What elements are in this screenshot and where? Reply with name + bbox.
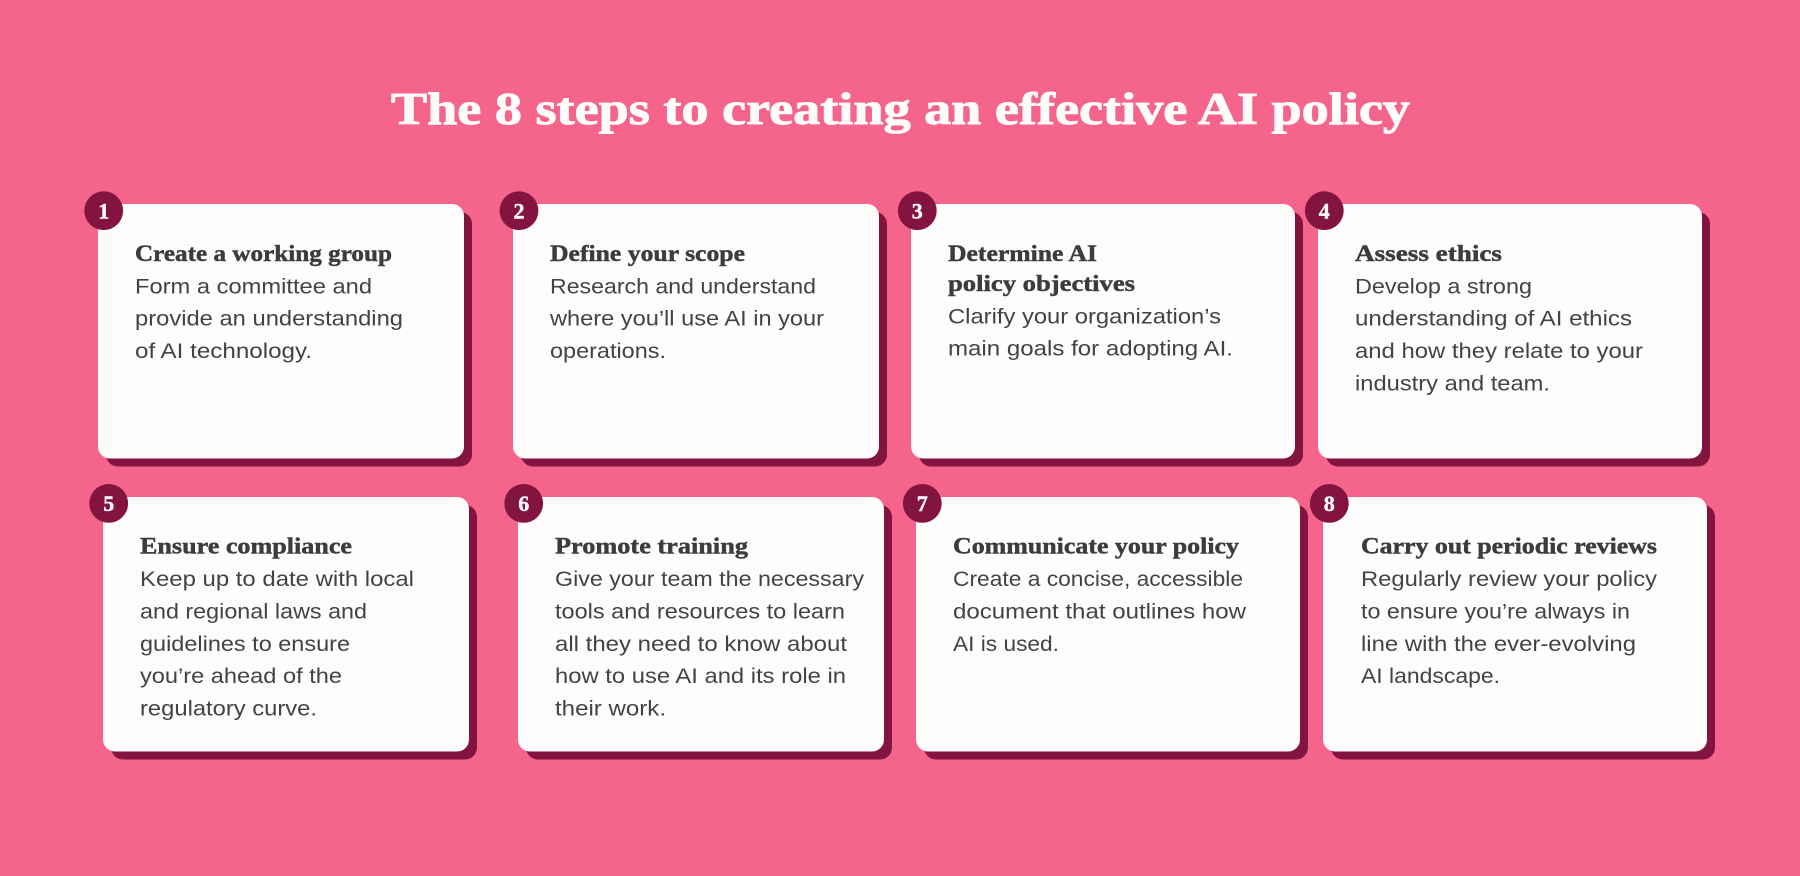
text: step 5 description: guidelines to ensure bbox=[140, 633, 350, 656]
badge: 1 bbox=[84, 191, 123, 230]
text: step 3 description bbox=[948, 305, 1233, 361]
heading: step 5: Ensure compliance bbox=[140, 534, 352, 559]
text: step 1 description bbox=[135, 275, 403, 363]
heading: step 2: Define your scope bbox=[550, 241, 745, 266]
text: step 7 description: AI is used. bbox=[953, 633, 1059, 656]
badge: 3: 3 bbox=[912, 198, 923, 224]
badge: 8 bbox=[1310, 484, 1349, 523]
heading: step 3: Determine AI bbox=[948, 241, 1097, 266]
text: step 8 description bbox=[1361, 568, 1658, 688]
text: step 6 description: Give your team the necessary bbox=[555, 568, 865, 591]
badge: 1: 1 bbox=[98, 198, 109, 224]
panel: step 4 bbox=[1305, 191, 1710, 467]
panel: step 1 bbox=[84, 191, 472, 467]
text: step 2 description bbox=[549, 275, 824, 363]
badge: 8: 8 bbox=[1324, 491, 1335, 516]
text: step 4 description: Develop a strong bbox=[1355, 275, 1532, 298]
text: step 6 description: how to use AI and its role in bbox=[555, 665, 846, 688]
text: step 6 description bbox=[555, 568, 865, 721]
text: step 8 description: to ensure you’re always in bbox=[1361, 600, 1630, 623]
badge: 6 bbox=[504, 484, 543, 523]
text: step 7 description bbox=[953, 568, 1247, 656]
text: step 2 description: Research and understand bbox=[550, 275, 816, 298]
badge: 7: 7 bbox=[917, 491, 928, 516]
badge: 5 bbox=[89, 484, 128, 523]
badge: 2: 2 bbox=[514, 198, 524, 224]
text: step 8 description: line with the ever-evolving bbox=[1361, 633, 1636, 656]
badge: 3 bbox=[898, 191, 937, 230]
panel: step 7 bbox=[903, 484, 1308, 760]
panel: step 2 bbox=[500, 191, 887, 467]
text: step 3 description: main goals for adopting AI. bbox=[948, 338, 1233, 361]
text: step 2 description: operations. bbox=[550, 340, 666, 363]
text: step 5 description: and regional laws and bbox=[140, 600, 367, 623]
text: step 4 description: and how they relate to your bbox=[1355, 340, 1643, 363]
heading: step 7: Communicate your policy bbox=[953, 534, 1240, 559]
heading: step 1: Create a working group bbox=[135, 241, 392, 266]
text: step 4 description bbox=[1355, 275, 1643, 395]
text: step 1 description: of AI technology. bbox=[135, 340, 312, 363]
heading: step 8: Carry out periodic reviews bbox=[1361, 534, 1657, 559]
heading: step 3 bbox=[948, 241, 1135, 296]
text: step 5 description: you’re ahead of the bbox=[140, 665, 342, 688]
text: step 7 description: Create a concise, accessible bbox=[953, 568, 1243, 591]
text: step 5 description bbox=[140, 568, 414, 721]
text: step 6 description: their work. bbox=[555, 698, 666, 721]
heading: step 6: Promote training bbox=[555, 534, 749, 559]
text: step 1 description: Form a committee and bbox=[135, 275, 372, 298]
text: step 8 description: Regularly review your policy bbox=[1361, 568, 1658, 591]
badge: 4: 4 bbox=[1319, 198, 1330, 224]
panel: step 6 bbox=[504, 484, 892, 760]
text: step 4 description: industry and team. bbox=[1355, 372, 1550, 395]
text: step 3 description: Clarify your organization’s bbox=[948, 305, 1221, 328]
text: step 2 description: where you’ll use AI in your bbox=[549, 308, 824, 331]
text: step 6 description: tools and resources to learn bbox=[555, 600, 845, 623]
badge: 2 bbox=[500, 191, 538, 230]
text: step 7 description: document that outlines how bbox=[953, 600, 1247, 623]
text: step 5 description: Keep up to date with local bbox=[140, 568, 414, 591]
text: step 1 description: provide an understanding bbox=[135, 308, 403, 331]
badge: 6: 6 bbox=[518, 491, 529, 516]
text: step 8 description: AI landscape. bbox=[1361, 665, 1500, 688]
text: step 4 description: understanding of AI ethics bbox=[1355, 308, 1632, 331]
text: step 6 description: all they need to know about bbox=[555, 633, 847, 656]
panel: step 3 bbox=[898, 191, 1303, 467]
panel: step 5 bbox=[89, 484, 477, 760]
badge: 4 bbox=[1305, 191, 1344, 230]
panel: step 8 bbox=[1310, 484, 1715, 760]
badge: 7 bbox=[903, 484, 942, 523]
text: step 5 description: regulatory curve. bbox=[140, 698, 317, 721]
heading: step 4: Assess ethics bbox=[1355, 241, 1502, 266]
title: The 8 steps to creating an effective AI policy bbox=[391, 84, 1411, 134]
badge: 5: 5 bbox=[103, 491, 114, 516]
heading: step 3: policy objectives bbox=[948, 271, 1135, 296]
